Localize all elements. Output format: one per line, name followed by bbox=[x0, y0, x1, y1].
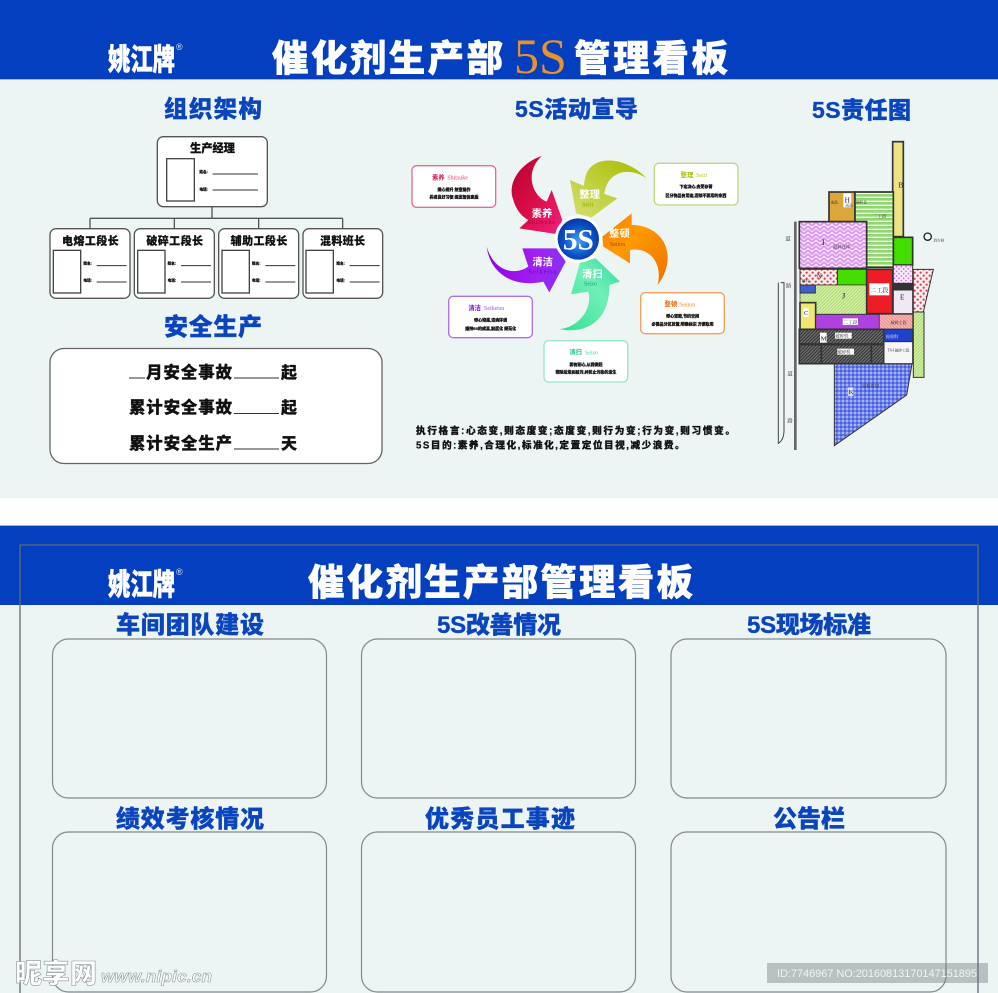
map labels: 辅料 bbox=[802, 278, 809, 283]
map labels: N bbox=[817, 271, 823, 280]
card: electric melting section chief bbox=[50, 229, 130, 298]
card: Seiketsu: 维持5S的成果,制度化 规范化 bbox=[465, 325, 516, 331]
card: Seiton: 必需品分区放置,明确标识 方便取用 bbox=[652, 321, 714, 327]
arrow: Shitsuke bbox=[512, 156, 562, 234]
arrow: Seiri bbox=[570, 160, 647, 217]
arrow: Seiso: Seiso bbox=[584, 281, 597, 287]
card: Shitsuke: 养成良好习惯 提高整体素质 bbox=[430, 194, 478, 200]
panel: outstanding staff: 优秀员工事迹 bbox=[425, 805, 575, 833]
card: Seiso: 要有耐心,从我做起 bbox=[570, 361, 603, 367]
card: Seiketsu: 清洁 bbox=[468, 303, 482, 312]
brand logo: 姚江牌 bbox=[108, 44, 175, 77]
card: auxiliary section chief: 电话: bbox=[252, 277, 261, 282]
motto text: 执行格言:心态变,则态度变;态度变,则行为变;行为变,则习惯变。 bbox=[416, 425, 735, 437]
center badge: 5S bbox=[563, 224, 594, 256]
map labels: 道 bbox=[785, 235, 791, 243]
map labels: 成品 bbox=[845, 203, 853, 208]
map labels: 二工段 bbox=[843, 319, 858, 326]
arrow: Seiton: Seiton bbox=[610, 242, 625, 248]
arrow: Seiso bbox=[559, 258, 620, 330]
card: auxiliary section chief: 辅助工段长 bbox=[231, 233, 287, 247]
org chart bbox=[50, 137, 383, 298]
card: auxiliary section chief: 姓名: bbox=[252, 261, 261, 266]
card: production manager: 电话: bbox=[199, 186, 208, 191]
map labels: 成品 bbox=[831, 199, 838, 204]
top board background bbox=[0, 79, 998, 498]
brand logo: ® bbox=[176, 567, 183, 577]
card: Seiso bbox=[544, 341, 628, 382]
arrow: Seiketsu: 清洁 bbox=[532, 255, 553, 268]
card: auxiliary section chief bbox=[219, 229, 299, 298]
card: mixing team leader: 电话: bbox=[336, 277, 345, 282]
main title bbox=[272, 28, 728, 84]
arrow: Seiso: 清扫 bbox=[582, 267, 603, 280]
heading: 5S promotion: 5S活动宣导 bbox=[515, 96, 638, 122]
card: Seiketsu: Seiketsu bbox=[484, 306, 504, 312]
map labels: 检验科 bbox=[886, 333, 898, 339]
card: Seiton: Seiton bbox=[680, 303, 695, 309]
panel: 5S improvement bbox=[362, 612, 636, 798]
card: electric melting section chief: 姓名: bbox=[83, 261, 92, 266]
map labels: 破碎工段 bbox=[891, 319, 907, 325]
map labels: J bbox=[842, 290, 846, 300]
card: crushing section chief: 破碎工段长 bbox=[146, 233, 203, 247]
map labels: B bbox=[898, 180, 903, 189]
arrow: Seiri: 整理 bbox=[579, 188, 601, 201]
arrow: Seiketsu bbox=[487, 247, 566, 292]
panel: notice board: 公告栏 bbox=[773, 806, 845, 833]
icon: hydrant circle bbox=[924, 233, 931, 240]
map labels: M bbox=[821, 336, 827, 343]
card: Seiso: 清扫 bbox=[569, 347, 582, 356]
safety panel: 累计安全事故 bbox=[129, 397, 232, 417]
panel: team building: 车间团队建设 bbox=[116, 611, 264, 639]
map labels: T6-1破碎工段 bbox=[888, 348, 910, 353]
watermark: 昵享网 bbox=[15, 958, 97, 989]
image id bar: ID:7746967 NO:20160813170147151895 bbox=[777, 968, 977, 980]
card: Seiso: Seiso bbox=[585, 351, 598, 357]
map labels: 路 bbox=[787, 417, 793, 425]
lower title: 催化剂生产部管理看板 bbox=[308, 562, 694, 603]
5S diagram bbox=[412, 156, 738, 451]
card: Seiri: 整理 bbox=[681, 170, 694, 179]
arrow: Seiri: Seiri bbox=[582, 202, 594, 208]
heading: safe production: 安全生产 bbox=[164, 313, 262, 341]
building zones bbox=[799, 142, 933, 446]
lower board background bbox=[0, 605, 998, 993]
map labels bbox=[785, 180, 945, 425]
card: mixing team leader: 姓名: bbox=[336, 261, 345, 266]
motto text: 5S目的:素养,合理化,标准化,定置定位目视,减少浪费。 bbox=[416, 439, 685, 451]
map labels: 破碎机 bbox=[838, 348, 851, 355]
map labels: 破碎机 bbox=[835, 332, 849, 339]
map labels: 道 bbox=[787, 369, 793, 377]
watermark bbox=[15, 958, 212, 989]
arrow: Shitsuke: Shitsuke bbox=[528, 220, 555, 226]
main title: 5S bbox=[514, 28, 567, 84]
map labels: H bbox=[845, 196, 851, 205]
top header band bbox=[0, 0, 998, 84]
arrow: Seiketsu: Seiketsu bbox=[529, 270, 557, 276]
heading: 5S responsibility map: 5S责任图 bbox=[812, 97, 911, 123]
map labels: 路 bbox=[786, 281, 792, 289]
card: Seiton: 得心坚致,节约空间 bbox=[666, 313, 699, 319]
brand logo: ® bbox=[176, 42, 183, 52]
responsibility map bbox=[778, 142, 945, 450]
heading: organization: 组织架构 bbox=[164, 95, 262, 122]
card: mixing team leader bbox=[303, 229, 383, 298]
arrow: Seiton: 整顿 bbox=[609, 227, 630, 240]
card: Seiton: 整顿 bbox=[665, 299, 678, 308]
map labels: 辅料仓 bbox=[856, 199, 867, 204]
card: production manager bbox=[157, 137, 267, 207]
card: Seiri: 下定决心,去芜存菁 bbox=[680, 183, 713, 189]
safety panel: 天 bbox=[281, 436, 297, 453]
panel: outstanding staff bbox=[362, 805, 636, 992]
card: Shitsuke: 提心提升 按章操作 bbox=[438, 186, 471, 192]
card: Seiton bbox=[641, 293, 724, 334]
image id bar bbox=[767, 963, 988, 983]
main title: 管理看板 bbox=[574, 38, 728, 79]
card: Seiketsu bbox=[449, 296, 532, 338]
map labels: 二工段 bbox=[870, 287, 888, 295]
card: crushing section chief bbox=[134, 229, 214, 298]
lower header band bbox=[0, 525, 998, 605]
safety panel: 起 bbox=[281, 364, 297, 382]
card: production manager: 姓名: bbox=[199, 169, 208, 174]
safety panel bbox=[50, 348, 382, 464]
panel: 5S site standard: 5S现场标准 bbox=[747, 612, 871, 639]
map labels: E bbox=[900, 292, 905, 301]
card: crushing section chief: 姓名: bbox=[168, 261, 176, 266]
card: production manager: 生产经理 bbox=[190, 141, 236, 155]
card: mixing team leader: 混料班长 bbox=[320, 233, 365, 247]
brand logo: 姚江牌 bbox=[108, 569, 175, 602]
card: Shitsuke bbox=[412, 166, 496, 207]
card: Seiri bbox=[654, 163, 738, 205]
card: electric melting section chief: 电话: bbox=[83, 277, 92, 282]
motto text bbox=[416, 425, 735, 451]
card: Seiso: 彻除垃圾和脏污,并防止污染的发生 bbox=[556, 369, 616, 375]
card: Shitsuke: 素养 bbox=[432, 172, 445, 181]
road lines bbox=[778, 222, 795, 450]
panel: performance review: 绩效考核情况 bbox=[116, 805, 264, 833]
panel: performance review bbox=[52, 805, 326, 992]
map labels: C bbox=[804, 310, 809, 317]
panel: 5S site standard bbox=[671, 612, 946, 798]
map labels: I bbox=[822, 238, 825, 247]
outer frame bbox=[20, 545, 978, 993]
watermark: www.nipic.cn bbox=[101, 967, 212, 986]
card: Seiri: 区分物品有用途,清除不要用的东西 bbox=[666, 192, 726, 198]
arrow: Shitsuke: 素养 bbox=[532, 207, 553, 220]
panel: 5S improvement: 5S改善情况 bbox=[437, 612, 561, 639]
card: electric melting section chief: 电熔工段长 bbox=[62, 233, 119, 247]
safety panel: 累计安全生产 bbox=[129, 433, 232, 453]
panel: notice board bbox=[671, 806, 946, 992]
map labels: 原料库房 bbox=[862, 382, 880, 389]
card: Seiketsu: 得心彻底,清爽环境 bbox=[474, 316, 507, 322]
safety panel: 月安全事故 bbox=[146, 362, 232, 382]
card: Shitsuke: Shitsuke bbox=[447, 175, 468, 181]
map labels: 消火栓 bbox=[933, 238, 945, 243]
safety panel: 起 bbox=[281, 399, 297, 417]
map labels: 原料仓库 bbox=[833, 243, 851, 250]
center badge bbox=[555, 215, 602, 263]
main title: 催化剂生产部 bbox=[272, 38, 503, 79]
card: Seiri: Seiri bbox=[696, 173, 708, 179]
panel: team building bbox=[52, 611, 326, 798]
card: crushing section chief: 电话: bbox=[168, 277, 176, 282]
arrow: Seiton bbox=[602, 213, 668, 285]
map labels: 二工段 bbox=[873, 213, 887, 220]
map labels: K bbox=[849, 389, 854, 396]
